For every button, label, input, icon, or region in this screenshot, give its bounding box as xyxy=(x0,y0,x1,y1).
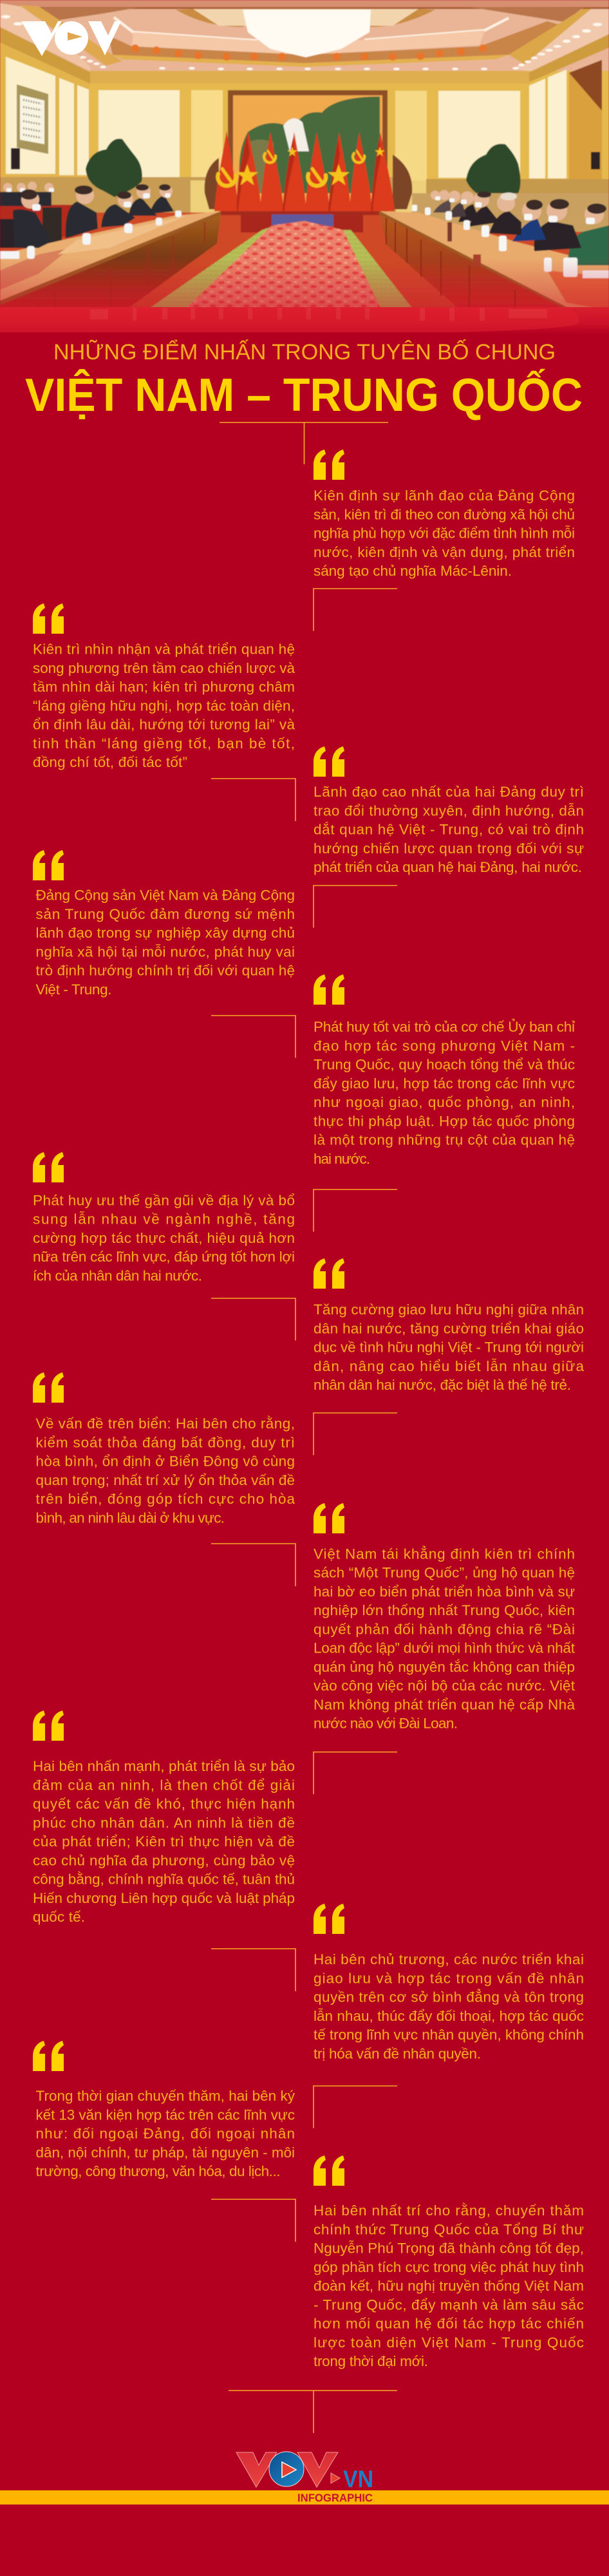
throne ornament xyxy=(205,155,412,209)
text: Nguyễn Phú Trọng đã thành công tốt đẹp, xyxy=(314,2240,584,2257)
logo: VOV.VN: VN xyxy=(343,2466,373,2492)
speakers xyxy=(11,148,600,169)
left delegation xyxy=(0,182,182,259)
text xyxy=(314,784,584,875)
corner connector xyxy=(314,886,397,927)
text: nữa trên các lĩnh vực, đáp ứng tốt hơn lợi xyxy=(33,1249,295,1265)
icon: quote xyxy=(314,450,344,480)
text: Phát huy tốt vai trò của cơ chế Ủy ban chỉ xyxy=(314,1019,575,1035)
text: kết 13 văn kiện hợp tác trên các lĩnh vực xyxy=(36,2107,295,2123)
text: nhân dân hai nước, đặc biệt là thế hệ trẻ. xyxy=(314,1377,571,1393)
text xyxy=(314,1302,584,1393)
corner connector xyxy=(314,1189,397,1231)
closing connector xyxy=(229,2391,397,2433)
text: Phát huy ưu thế gần gũi về địa lý và bổ xyxy=(33,1192,295,1208)
text: là một trong những trụ cột của quan hệ xyxy=(314,1132,575,1148)
panel: left 4 xyxy=(33,1372,295,1586)
text: nghiệp lớn thống nhất Trung Quốc, kiên xyxy=(314,1602,575,1618)
panel: right 7 xyxy=(229,2155,584,2433)
back table and chairs xyxy=(0,193,609,248)
panel: right 1 xyxy=(314,450,575,631)
text: sáng tạo chủ nghĩa Mác-Lênin. xyxy=(314,563,512,579)
text: đoàn kết, hữu nghị truyền thống Việt Nam xyxy=(314,2278,584,2294)
text: của phát triển; Kiên trì thực hiện và đề xyxy=(33,1833,295,1850)
text: Hai bên nhấn mạnh, phát triển là sự bảo xyxy=(33,1758,295,1774)
text: Hiến chương Liên hợp quốc và luật pháp xyxy=(33,1890,295,1906)
text: trường, công thương, văn hóa, du lịch... xyxy=(36,2163,281,2179)
text: “láng giềng hữu nghị, hợp tác toàn diện, xyxy=(33,697,295,714)
text: nghĩa xã hội tại mỗi nước, phát huy vai xyxy=(36,943,295,960)
red transition band under photo xyxy=(0,307,609,334)
text: hướng chiến lược quan trọng đối với sự xyxy=(314,840,584,857)
corner connector xyxy=(211,1949,295,1991)
text xyxy=(314,2202,584,2369)
text: ích của nhân dân hai nước. xyxy=(33,1267,202,1283)
panel: left 5 xyxy=(33,1710,295,1991)
text: hai nước. xyxy=(314,1151,370,1167)
text xyxy=(36,887,295,998)
text: lãnh đạo trong sự nghiệp xây dựng chủ xyxy=(36,925,295,941)
text: Loan độc lập” dưới mọi hình thức và nhất xyxy=(314,1640,576,1656)
text: quyết các vấn đề khó, thực hiện hạnh xyxy=(33,1795,295,1812)
flags xyxy=(214,131,395,211)
wall calligraphy frame xyxy=(17,84,48,154)
text: quyền trên cơ sở bình đẳng và tôn trọng xyxy=(314,1989,584,2005)
panel: left 6 xyxy=(33,2041,295,2242)
text: Hai bên nhất trí cho rằng, chuyến thăm xyxy=(314,2202,584,2219)
text: nghĩa phù hợp với đặc điểm tình hình mỗi xyxy=(314,526,575,541)
icon: quote xyxy=(314,1503,344,1533)
panel: right 5 xyxy=(314,1503,576,1794)
icon: quote xyxy=(314,1258,344,1289)
text xyxy=(33,641,295,770)
text: như: đối ngoại Đảng, đối ngoại nhân xyxy=(36,2125,295,2142)
text: Trung Quốc, quy hoạch tổng thể và thúc xyxy=(314,1056,575,1073)
text: Hai bên chủ trương, các nước triển khai xyxy=(314,1951,584,1967)
ceiling xyxy=(0,0,609,72)
text: Đảng Cộng sản Việt Nam và Đảng Cộng xyxy=(36,887,295,904)
text: dân hai nước, tăng cường triển khai giáo xyxy=(314,1320,584,1336)
panel: right 6 xyxy=(314,1904,584,2128)
icon: quote xyxy=(33,1710,64,1741)
text: tinh thần “láng giềng tốt, bạn bè tốt, xyxy=(33,735,295,752)
right table xyxy=(379,211,609,316)
corner connector xyxy=(314,589,397,631)
panel: left 1 xyxy=(33,603,295,821)
corner connector xyxy=(211,779,295,821)
icon: quote xyxy=(33,1152,64,1182)
left table xyxy=(0,211,221,308)
text: sản Trung Quốc đảm đương sứ mệnh xyxy=(36,906,295,922)
text: thực thi pháp luật. Hợp tác quốc phòng xyxy=(314,1113,575,1129)
text: Kiên định sự lãnh đạo của Đảng Cộng xyxy=(314,488,575,504)
text: Lãnh đạo cao nhất của hai Đảng duy trì xyxy=(314,784,584,800)
corner connector xyxy=(211,1016,295,1057)
text xyxy=(314,1546,576,1732)
icon: quote xyxy=(33,1372,64,1403)
text: trao đổi thường xuyên, định hướng, dẫn xyxy=(314,802,584,819)
corner connector xyxy=(211,2199,295,2242)
text xyxy=(314,1951,584,2061)
panel: right 2 xyxy=(314,746,584,927)
text: nước, kiên định và vận dụng, phát triển xyxy=(314,544,575,560)
text: đạo hợp tác song phương Việt Nam - xyxy=(314,1037,575,1054)
panel: right 4 xyxy=(314,1258,584,1455)
title line 2: VIỆT NAM – TRUNG QUỐC xyxy=(25,368,583,421)
text: Kiên trì nhìn nhận và phát triển quan hệ xyxy=(33,641,295,657)
flower bed xyxy=(150,221,412,308)
text: tầm nhìn dài hạn; kiên trì phương châm xyxy=(33,679,295,695)
text: công bằng, chính nghĩa quốc tế, tuân thủ xyxy=(33,1871,295,1887)
text: song phương trên tầm cao chiến lược và xyxy=(33,660,295,676)
text xyxy=(36,1416,295,1526)
logo: VOV.VN xyxy=(236,2452,373,2492)
footer band xyxy=(0,2490,609,2505)
icon: quote xyxy=(314,1904,344,1934)
text: cao chủ nghĩa đa phương, cùng bảo vệ xyxy=(33,1852,295,1868)
corner connector xyxy=(314,1752,397,1794)
text: hòa bình, ổn định ở Biển Đông vô cùng xyxy=(36,1453,295,1470)
text: quyết phản đối hành động chia rẽ “Đài xyxy=(314,1621,575,1637)
text xyxy=(36,2088,295,2179)
panel: right 3 xyxy=(314,974,575,1231)
text: trị hóa vấn đề nhân quyền. xyxy=(314,2045,481,2061)
corner connector xyxy=(211,1544,295,1586)
text: dục về tình hữu nghị Việt - Trung tới người xyxy=(314,1340,584,1355)
text: Nam không phát triển quan hệ cấp Nhà xyxy=(314,1696,575,1712)
infographic label: INFOGRAPHIC xyxy=(297,2491,373,2504)
text: sản, kiên trì đi theo con đường xã hội chủ xyxy=(314,506,575,522)
text: trên biển, đóng góp tích cực cho hòa xyxy=(36,1491,295,1507)
text: tế trong lĩnh vực nhân quyền, không chính xyxy=(314,2027,584,2043)
text: phúc cho nhân dân. An ninh là tiền đề xyxy=(33,1815,295,1831)
panel: left 3 xyxy=(33,1152,295,1341)
text: nước nào với Đài Loan. xyxy=(314,1716,458,1732)
trees xyxy=(86,138,520,201)
text: lẫn nhau, thúc đẩy đối thoại, hợp tác quốc xyxy=(314,2008,584,2024)
panel: left 2 xyxy=(33,850,295,1057)
text: phát triển của quan hệ hai Đảng, hai nước. xyxy=(314,859,582,875)
text: vào công việc nội bộ của các nước. Việt xyxy=(314,1678,576,1694)
text: Trong thời gian chuyến thăm, hai bên ký xyxy=(36,2088,295,2104)
title xyxy=(25,339,583,421)
text: cường hợp tác thực chất, hiệu quả hơn xyxy=(33,1230,295,1246)
text: dân, nâng cao hiểu biết lẫn nhau giữa xyxy=(314,1358,584,1374)
text: dắt quan hệ Việt - Trung, có vai trò định xyxy=(314,822,584,837)
right delegation xyxy=(412,190,609,278)
text xyxy=(314,488,575,579)
head table xyxy=(221,211,382,232)
text: hai bờ eo biển phát triển hòa bình và sự xyxy=(314,1584,575,1600)
text: hơn mối quan hệ đối tác hợp tác chiến xyxy=(314,2316,584,2331)
text xyxy=(33,1758,295,1925)
text: đảm của an ninh, là then chốt để giải xyxy=(33,1777,295,1793)
icon: chandelier xyxy=(243,10,371,57)
text: quan trọng; nhất trí xử lý ổn thỏa vấn đề xyxy=(36,1472,295,1488)
icon: quote xyxy=(314,746,344,777)
icon: quote xyxy=(33,603,64,634)
corner connector xyxy=(314,2086,397,2128)
connector from title xyxy=(220,422,388,464)
text: Việt Nam tái khẳng định kiên trì chính xyxy=(314,1546,575,1562)
icon: quote xyxy=(33,2041,64,2071)
photo bottom fade xyxy=(0,258,609,309)
icon: quote xyxy=(33,850,64,880)
text: lược toàn diện Việt Nam - Trung Quốc xyxy=(314,2334,584,2351)
text xyxy=(314,1019,575,1167)
hero photo: meeting room with flags xyxy=(0,0,609,316)
text: Tăng cường giao lưu hữu nghị giữa nhân xyxy=(314,1302,584,1318)
logo: VOV white xyxy=(21,21,121,56)
corner connector xyxy=(314,1413,397,1455)
text: như ngoại giao, quốc phòng, an ninh, xyxy=(314,1094,575,1110)
text: góp phần tích cực trong việc phát huy tình xyxy=(314,2259,584,2275)
text: dân, nội chính, tư pháp, tài nguyên - môi xyxy=(36,2145,295,2161)
painting xyxy=(228,90,388,213)
floor xyxy=(0,213,609,309)
icon: quote xyxy=(314,974,344,1005)
corner connector xyxy=(211,1298,295,1341)
text xyxy=(33,1192,295,1283)
text: Việt - Trung. xyxy=(36,981,112,998)
text: kiểm soát thỏa đáng bất đồng, duy trì xyxy=(36,1434,295,1450)
text: giao lưu và hợp tác trong vấn đề nhân xyxy=(314,1970,584,1986)
text: trò định hướng chính trị đối với quan hệ xyxy=(36,963,295,979)
icon: quote xyxy=(314,2155,344,2186)
text: bình, an ninh lâu dài ở khu vực. xyxy=(36,1510,225,1526)
wall xyxy=(0,27,609,222)
text: - Trung Quốc, đẩy mạnh và làm sâu sắc xyxy=(314,2297,584,2313)
text: quốc tế. xyxy=(33,1909,85,1925)
text: ổn định lâu dài, hướng tới tương lai” và xyxy=(33,716,295,733)
text: chính thức Trung Quốc của Tổng Bí thư xyxy=(314,2221,584,2237)
text: đẩy giao lưu, hợp tác trong các lĩnh vực xyxy=(314,1075,575,1092)
text: sách “Một Trung Quốc”, ủng hộ quan hệ xyxy=(314,1565,575,1581)
text: trong thời đại mới. xyxy=(314,2353,428,2369)
text: đồng chí tốt, đối tác tốt” xyxy=(33,754,187,770)
text: quán ủng hộ nguyên tắc không can thiệp xyxy=(314,1659,575,1675)
text: Về vấn đề trên biển: Hai bên cho rằng, xyxy=(36,1416,295,1432)
text: sung lẫn nhau về ngành nghề, tăng xyxy=(33,1211,295,1227)
title line 1: NHỮNG ĐIỂM NHẤN TRONG TUYÊN BỐ CHUNG xyxy=(53,339,556,365)
